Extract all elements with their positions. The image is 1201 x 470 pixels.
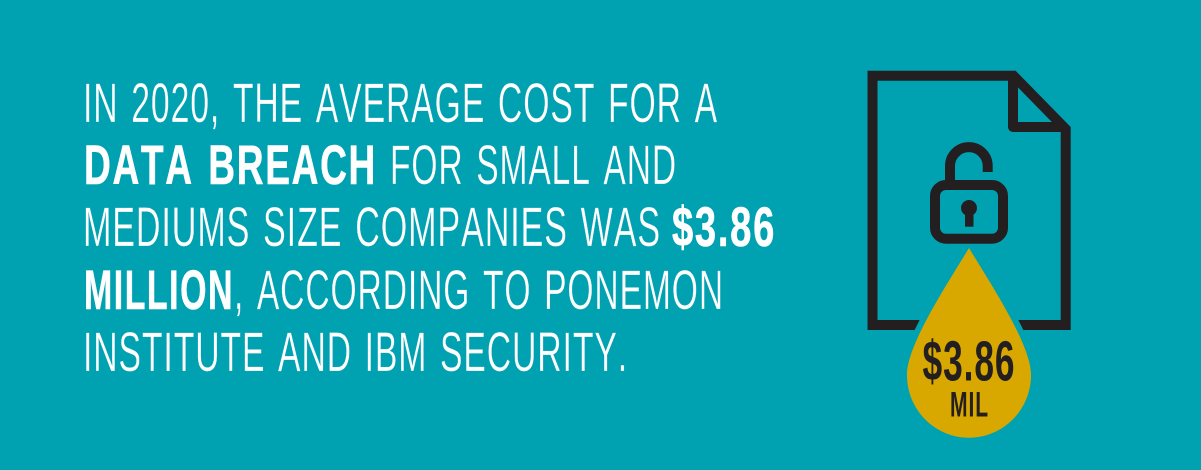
text block: data breach statement: IN 2020, THE AVERAGE COST FOR A bbox=[83, 71, 718, 134]
text block: data breach statement: $3.86 bbox=[672, 195, 776, 258]
icon: document with folded corner bbox=[872, 76, 1066, 325]
text block: data breach statement: FOR SMALL AND bbox=[390, 133, 677, 196]
icon: open padlock bbox=[935, 147, 1003, 239]
text block: data breach statement: DATA BREACH bbox=[84, 133, 377, 196]
drop amount: $3.86 bbox=[922, 330, 1016, 394]
text block: data breach statement: MILLION bbox=[84, 258, 234, 321]
text block: data breach statement bbox=[83, 71, 776, 383]
text block: data breach statement: , ACCORDING TO PONEMON bbox=[234, 258, 724, 321]
text block: data breach statement: INSTITUTE AND IBM SECURITY. bbox=[83, 320, 628, 383]
icon: gold drop with amount bbox=[907, 248, 1031, 438]
drop unit: MIL bbox=[950, 386, 989, 425]
text block: data breach statement: MEDIUMS SIZE COMPANIES WAS bbox=[83, 195, 661, 258]
